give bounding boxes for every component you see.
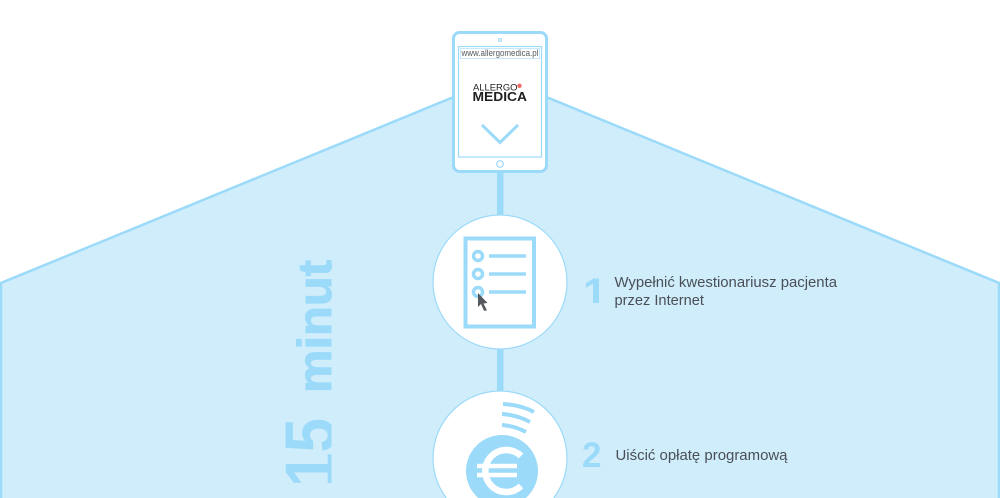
step 1 text bbox=[614, 274, 838, 309]
icon: mouse cursor bbox=[478, 293, 488, 311]
step 1 number: 1 bbox=[583, 270, 607, 318]
euro sign bbox=[477, 450, 521, 492]
step 1 text: Wypełnić kwestionariusz pacjenta bbox=[614, 274, 838, 291]
vertical label: 15 minut bbox=[286, 260, 332, 484]
logo: Allergo Medica: ALLERGO bbox=[473, 82, 518, 94]
icon: questionnaire in circle bbox=[433, 215, 567, 349]
logo: Allergo Medica: MEDICA bbox=[472, 89, 527, 104]
connector lines bbox=[497, 170, 504, 395]
vertical label: 15 minut: minut bbox=[288, 260, 341, 393]
logo: Allergo Medica bbox=[472, 82, 527, 104]
step 2 text: Uiścić opłatę programową bbox=[616, 447, 788, 464]
icon: tablet with website bbox=[454, 32, 546, 172]
icon: contactless euro payment in circle bbox=[433, 391, 567, 498]
step 1 text: przez Internet bbox=[614, 292, 705, 309]
tablet home button bbox=[497, 161, 503, 167]
step 2 number: 2 bbox=[582, 436, 602, 475]
icon: tablet with website: www.allergomedica.pl bbox=[461, 48, 538, 58]
icon: down chevron bbox=[482, 125, 518, 142]
vertical label: 15 minut: 15 bbox=[272, 418, 351, 487]
